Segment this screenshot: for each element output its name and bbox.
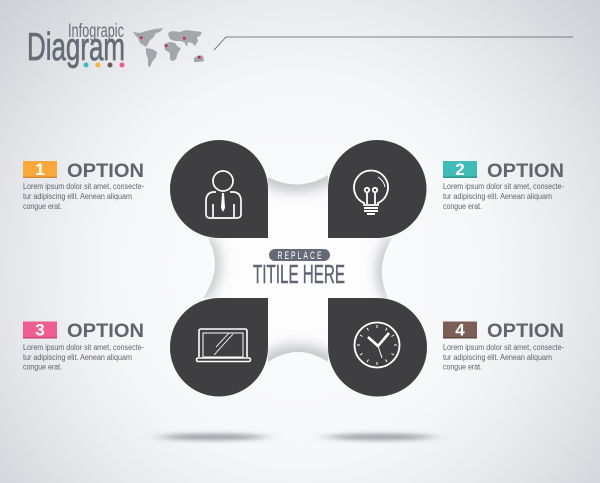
option 4 — [443, 320, 564, 372]
icon: clock — [354, 322, 400, 368]
blob: bottom right — [328, 298, 427, 397]
option 3: tur adipiscing elit. Aenean aliquam — [23, 353, 132, 362]
option 3: 3 — [35, 320, 45, 340]
option 1: tur adipiscing elit. Aenean aliquam — [23, 192, 132, 201]
option 1: Lorem ipsum dolor sit amet, consecte- — [23, 182, 144, 191]
option 2: OPTION — [487, 160, 564, 182]
option 4: OPTION — [487, 320, 564, 342]
option 2: 2 — [455, 160, 465, 179]
header line — [214, 37, 573, 50]
option 4: 4 — [455, 320, 465, 340]
option 4: Lorem ipsum dolor sit amet, consecte- — [443, 343, 564, 352]
panel: central shape — [197, 172, 398, 365]
option 2 — [443, 160, 564, 211]
heading: Infograpic Diagram: Infograpic — [68, 21, 124, 42]
option 4: congue erat. — [443, 362, 482, 372]
heading: Infograpic Diagram — [27, 21, 125, 69]
icon: laptop — [196, 329, 250, 362]
option 3 — [23, 320, 144, 372]
center title: TITILE HERE — [253, 259, 345, 289]
blob: top left — [170, 140, 268, 238]
option 3: OPTION — [67, 320, 144, 342]
option 1: 1 — [35, 160, 45, 179]
world map — [133, 28, 204, 67]
icon: person — [206, 171, 241, 218]
blob: top right — [328, 140, 426, 238]
option 2: tur adipiscing elit. Aenean aliquam — [443, 192, 552, 201]
map markers — [140, 36, 200, 58]
option 2: congue erat. — [443, 202, 482, 211]
option 1: OPTION — [67, 160, 144, 182]
option 3: Lorem ipsum dolor sit amet, consecte- — [23, 343, 144, 352]
option 1: congue erat. — [23, 202, 62, 211]
ground shadows — [161, 434, 432, 440]
icon: light bulb — [354, 171, 388, 214]
option 3: congue erat. — [23, 362, 62, 372]
option 2: Lorem ipsum dolor sit amet, consecte- — [443, 182, 564, 191]
option 1 — [23, 160, 144, 211]
heading: Infograpic Diagram: Diagram — [27, 26, 125, 69]
center title: REPLACE — [277, 249, 322, 261]
center title — [253, 249, 345, 289]
option 4: tur adipiscing elit. Aenean aliquam — [443, 353, 552, 362]
blob: bottom left — [170, 298, 268, 396]
